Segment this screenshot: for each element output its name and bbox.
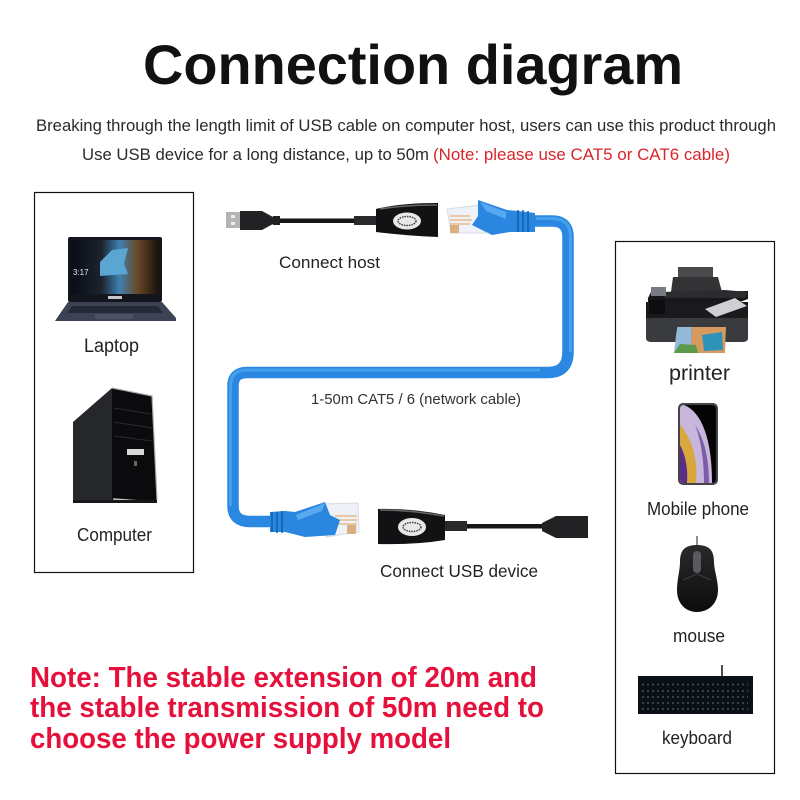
icon: laptop: 3:17 <box>73 268 89 277</box>
label: mouse: mouse <box>673 626 725 646</box>
subtitle text <box>36 117 776 164</box>
bottom USB adapter: extender and female USB socket <box>378 509 588 544</box>
subtitle text: Use USB device for a long distance, up to 50m <box>82 146 429 164</box>
icon: computer tower <box>73 388 157 503</box>
panel: host devices <box>34 192 194 572</box>
icon: mouse <box>677 536 718 612</box>
icon: mobile phone <box>678 403 718 485</box>
label: network cable: 1-50m CAT5 / 6 (network cable) <box>311 391 521 408</box>
note text: choose the power supply model <box>30 723 451 755</box>
top RJ45 plug <box>447 200 535 235</box>
panel: peripheral devices <box>616 242 774 774</box>
note text: the stable transmission of 50m need to <box>30 692 544 724</box>
label: Laptop: Laptop <box>84 336 139 357</box>
note text <box>30 662 544 755</box>
top USB adapter: male USB plug and extender <box>226 203 438 237</box>
icon: keyboard <box>638 665 753 714</box>
icon: laptop <box>55 237 176 321</box>
label: Computer: Computer <box>77 524 152 545</box>
blue network cable <box>230 218 570 522</box>
bottom RJ45 plug <box>270 502 359 537</box>
subtitle text: (Note: please use CAT5 or CAT6 cable) <box>433 146 730 164</box>
label: Connect USB device: Connect USB device <box>380 561 538 581</box>
icon: printer <box>646 267 748 353</box>
label: Mobile phone: Mobile phone <box>647 499 749 519</box>
subtitle text: Breaking through the length limit of USB cable on computer host, users can use this product through <box>36 117 776 135</box>
label: Connect host: Connect host <box>279 253 380 272</box>
title: Connection diagram <box>143 33 683 96</box>
label: keyboard: keyboard <box>662 728 732 748</box>
note text: Note: The stable extension of 20m and <box>30 662 537 694</box>
label: printer: printer <box>669 362 730 385</box>
